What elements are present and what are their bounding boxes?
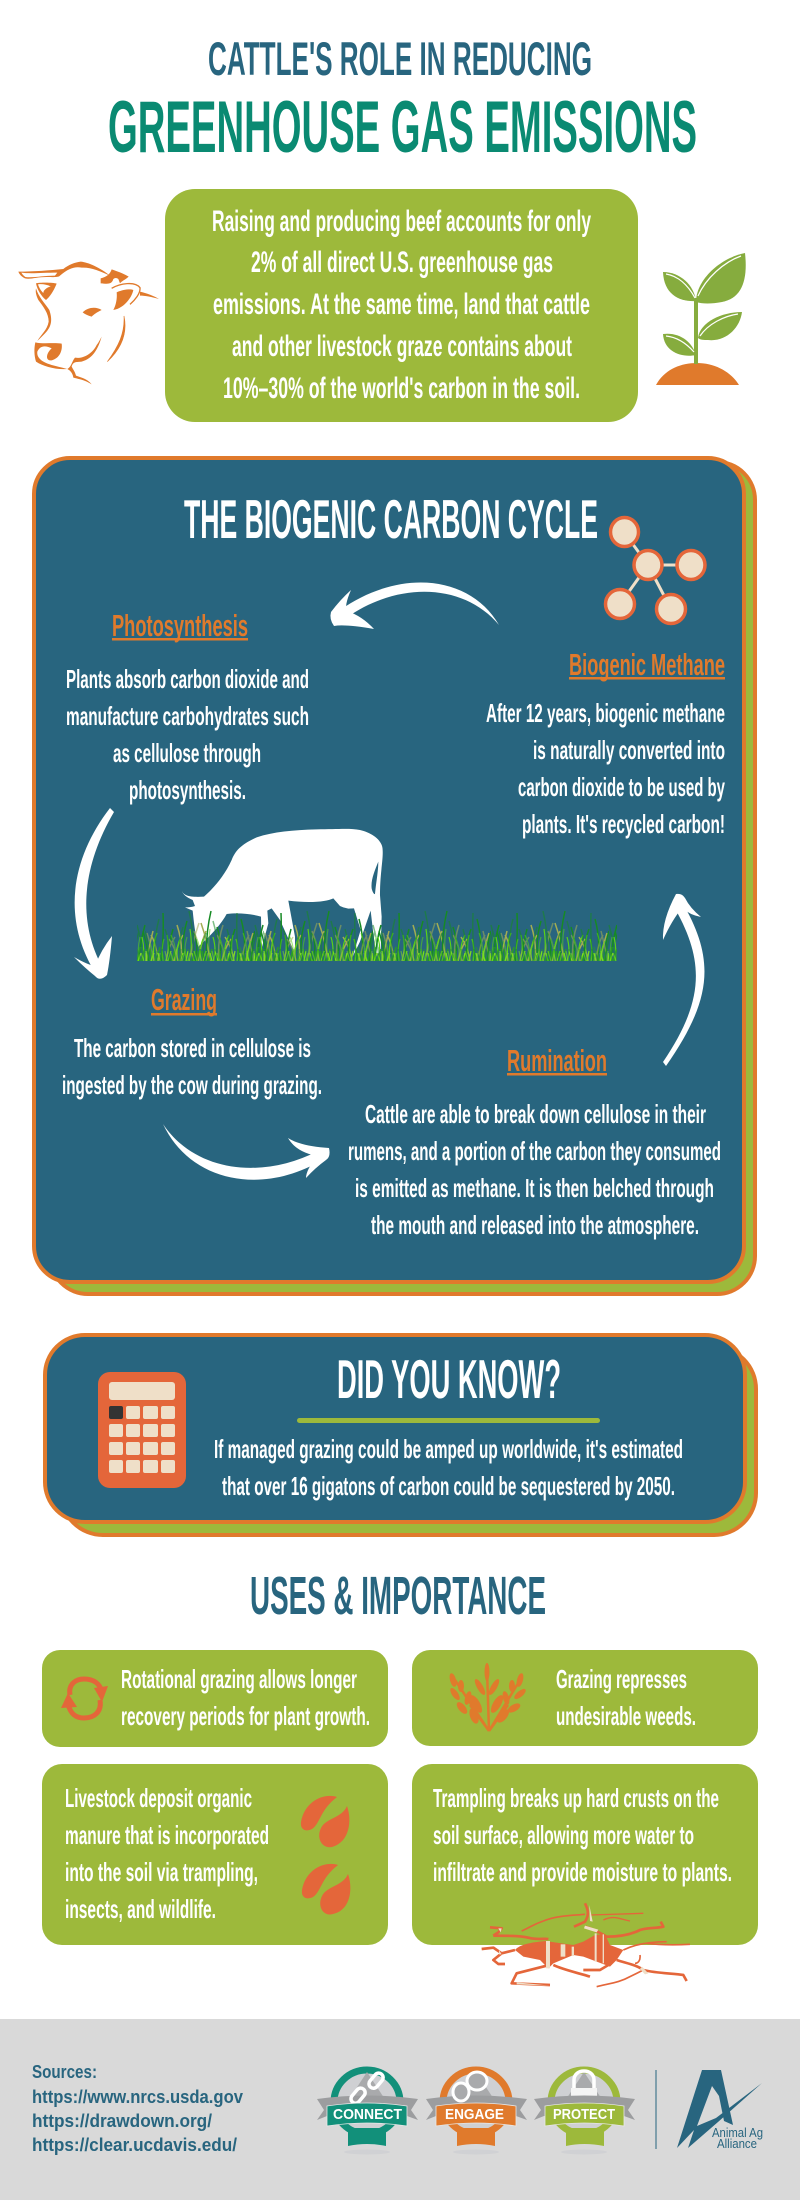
icon: hoof print lower (302, 1864, 350, 1915)
icon: rotation arrows (61, 1679, 108, 1718)
badge: connect (317, 2070, 418, 2154)
footer band (0, 2019, 800, 2200)
sources (32, 2062, 243, 2155)
icon: cow head (18, 262, 159, 384)
icon: weed (448, 1663, 527, 1731)
logo: animal ag alliance: Animal Ag (712, 2125, 763, 2140)
text: photosynthesis: Plants absorb carbon dioxide and (66, 664, 309, 694)
title (108, 32, 697, 168)
text: grazing: ingested by the cow during grazing. (62, 1070, 322, 1100)
badge: engage (426, 2070, 527, 2154)
text: biogenic methane (486, 698, 725, 839)
arrow: rumination to methane (663, 894, 704, 1066)
panel: did you know (45, 1335, 756, 1535)
text (433, 1783, 732, 1887)
icon: plant (656, 253, 746, 385)
panel backing (61, 1347, 756, 1535)
text: undesirable weeds. (556, 1701, 696, 1731)
badge: engage: ENGAGE (445, 2106, 504, 2123)
panel: manure (42, 1764, 388, 1945)
heading: rumination (507, 1043, 607, 1078)
text: Livestock deposit organic (65, 1783, 252, 1813)
sources: https://drawdown.org/ (32, 2111, 212, 2131)
panel: intro (165, 189, 638, 422)
panel: rotational grazing (42, 1650, 388, 1747)
heading: grazing (151, 982, 217, 1017)
text: photosynthesis (66, 664, 309, 805)
icon: calculator (98, 1372, 186, 1488)
sources: Sources: (32, 2062, 97, 2082)
intro text (212, 205, 591, 405)
sources: https://www.nrcs.usda.gov (32, 2087, 243, 2107)
logo: animal ag alliance (656, 2070, 763, 2151)
heading: grazing: Grazing (151, 982, 217, 1017)
badge: protect: PROTECT (553, 2106, 615, 2123)
text (556, 1664, 696, 1731)
text: into the soil via trampling, (65, 1857, 258, 1887)
logo: animal ag alliance: Alliance (717, 2136, 757, 2151)
icon: hoof print upper (301, 1796, 349, 1847)
text: photosynthesis: as cellulose through (113, 738, 261, 768)
text: Rotational grazing allows longer (121, 1664, 357, 1694)
sources: https://clear.ucdavis.edu/ (32, 2135, 237, 2155)
panel: the biogenic carbon cycle (34, 458, 755, 1294)
heading: photosynthesis: Photosynthesis (112, 608, 248, 643)
text (65, 1783, 269, 1924)
heading: photosynthesis (112, 608, 248, 643)
text: grazing (62, 1033, 322, 1100)
icon: molecule (606, 518, 705, 624)
icon: cracked soil (482, 1903, 690, 1987)
text: manure that is incorporated (65, 1820, 269, 1850)
badge: connect: CONNECT (333, 2106, 402, 2123)
intro text: and other livestock graze contains about (232, 330, 572, 363)
panel: trampling (412, 1764, 758, 1987)
text (214, 1434, 683, 1501)
intro box (165, 189, 638, 422)
arrow: methane to photosynthesis (330, 583, 499, 629)
text: recovery periods for plant growth. (121, 1701, 370, 1731)
text: rumination (348, 1099, 721, 1240)
panel front (34, 458, 744, 1282)
panel backing (50, 462, 755, 1294)
badge: protect (534, 2070, 635, 2154)
intro text: 2% of all direct U.S. greenhouse gas (251, 246, 553, 279)
grass (137, 907, 617, 961)
text: photosynthesis: photosynthesis. (129, 775, 246, 805)
panel: weeds (412, 1650, 758, 1746)
text: grazing: The carbon stored in cellulose is (74, 1033, 311, 1063)
arrow: photosynthesis to grazing (74, 808, 114, 979)
illustration: grazing cow (137, 829, 617, 961)
arrow: grazing to rumination (163, 1124, 330, 1180)
text: Grazing represses (556, 1664, 687, 1694)
text: photosynthesis: manufacture carbohydrates such (66, 701, 309, 731)
heading: rumination: Rumination (507, 1043, 607, 1078)
panel front (45, 1335, 745, 1522)
text (121, 1664, 370, 1731)
text: insects, and wildlife. (65, 1894, 216, 1924)
panel: did you know: DID YOU KNOW? (337, 1348, 561, 1410)
